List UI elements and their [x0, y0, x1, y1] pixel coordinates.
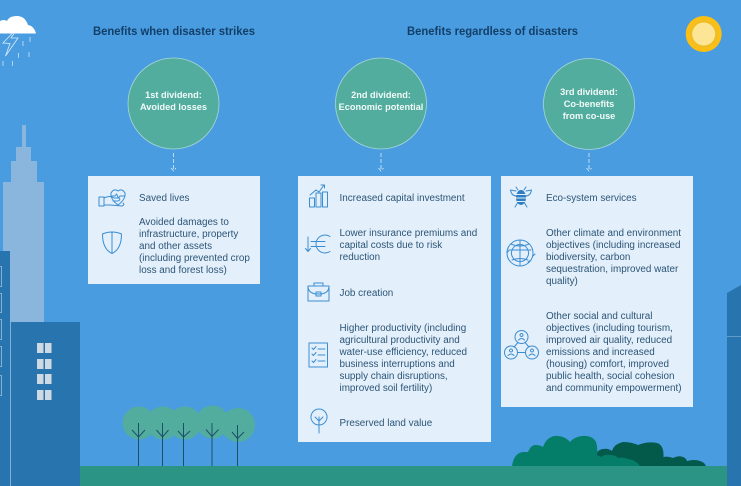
text: higher productivity: Higher productivity (including [340, 323, 466, 334]
icon: briefcase [308, 283, 329, 301]
skyline left [0, 125, 80, 486]
icon: sun [686, 16, 722, 52]
icon: checklist [309, 343, 328, 367]
text: avoided damages: infrastructure, property [139, 229, 238, 240]
heading: benefits regardless of disasters: Benefits regardless of disasters [407, 24, 578, 38]
text: higher productivity: improved soil fertility) [340, 383, 432, 394]
circle: 1st dividend: 1st dividend: [145, 90, 202, 100]
text: avoided damages: loss and forest loss) [139, 265, 227, 276]
arrow 1 [171, 153, 176, 171]
text: avoided damages: (including prevented crop [139, 253, 250, 264]
circle: 2nd dividend: Economic potential [339, 102, 423, 112]
icon: heart in hand [99, 190, 125, 206]
text: other climate: sequestration, improved water [546, 264, 679, 275]
icon: land value tree [311, 409, 327, 433]
text: preserved land value: Preserved land value [340, 418, 433, 429]
tall tower [3, 125, 44, 322]
text: other social: public health, social cohesion [546, 371, 674, 382]
bushes [512, 436, 706, 466]
text: other climate: quality) [546, 276, 578, 287]
text: lower insurance: Lower insurance premiums and [340, 228, 477, 239]
text: lower insurance: reduction [340, 252, 380, 263]
circle: 3rd dividend: from co-use [563, 111, 615, 121]
text: other social: improved air quality, reduced [546, 335, 672, 346]
panel: first dividend [88, 176, 260, 284]
text: avoided damages: and other assets [139, 241, 212, 252]
text: other social: (housing) comfort, improved [546, 359, 669, 370]
icon: growth chart [310, 185, 328, 207]
text: other climate: objectives (including increased [546, 240, 680, 251]
arrow 2 [378, 153, 384, 171]
icon: globe cycle [507, 240, 535, 266]
text: other social: and community empowerment) [546, 383, 682, 394]
circle: 3rd dividend: 3rd dividend: [560, 87, 618, 97]
icon: euro down [306, 235, 330, 253]
main building [10, 322, 80, 486]
building right [727, 285, 741, 486]
circle: 2nd dividend [336, 58, 426, 149]
text: lower insurance: capital costs due to risk [340, 240, 442, 251]
circle: 3rd dividend: Co-benefits [564, 99, 614, 109]
circle: 1st dividend: Avoided losses [140, 102, 207, 112]
icon: storm cloud [0, 16, 36, 66]
text: capital investment: Increased capital investment [340, 193, 465, 204]
trees [122, 406, 255, 466]
circle: 2nd dividend: 2nd dividend: [351, 90, 411, 100]
ground [80, 466, 727, 486]
text: saved lives: Saved lives [139, 193, 190, 204]
text: ecosystem services: Eco-system services [546, 193, 637, 204]
text: other climate: biodiversity, carbon [546, 252, 630, 263]
left building [0, 251, 10, 486]
text: avoided damages: Avoided damages to [139, 217, 229, 228]
text: higher productivity: water-use efficiency, reduced [338, 347, 467, 358]
circle: 3rd dividend [544, 58, 634, 150]
icon: community network [504, 330, 538, 359]
arrow 3 [586, 153, 592, 171]
text: higher productivity: business interruptions and [340, 359, 455, 370]
icon: bee [510, 187, 532, 207]
text: higher productivity: agricultural productivity and [340, 335, 460, 346]
text: higher productivity: supply chain disruptions, [340, 371, 448, 382]
text: other social: Other social and cultural [546, 311, 652, 322]
icon: shield [102, 232, 122, 254]
text: other social: objectives (including tourism, [546, 323, 673, 334]
text: other climate: Other climate and environment [546, 228, 681, 239]
circle: 1st dividend [128, 58, 219, 149]
panel: third dividend [501, 176, 693, 407]
panel: second dividend [298, 176, 491, 442]
text: job creation: Job creation [340, 288, 393, 299]
text: other social: emissions and increased [546, 347, 655, 358]
heading: benefits when disaster strikes: Benefits when disaster strikes [93, 24, 255, 38]
